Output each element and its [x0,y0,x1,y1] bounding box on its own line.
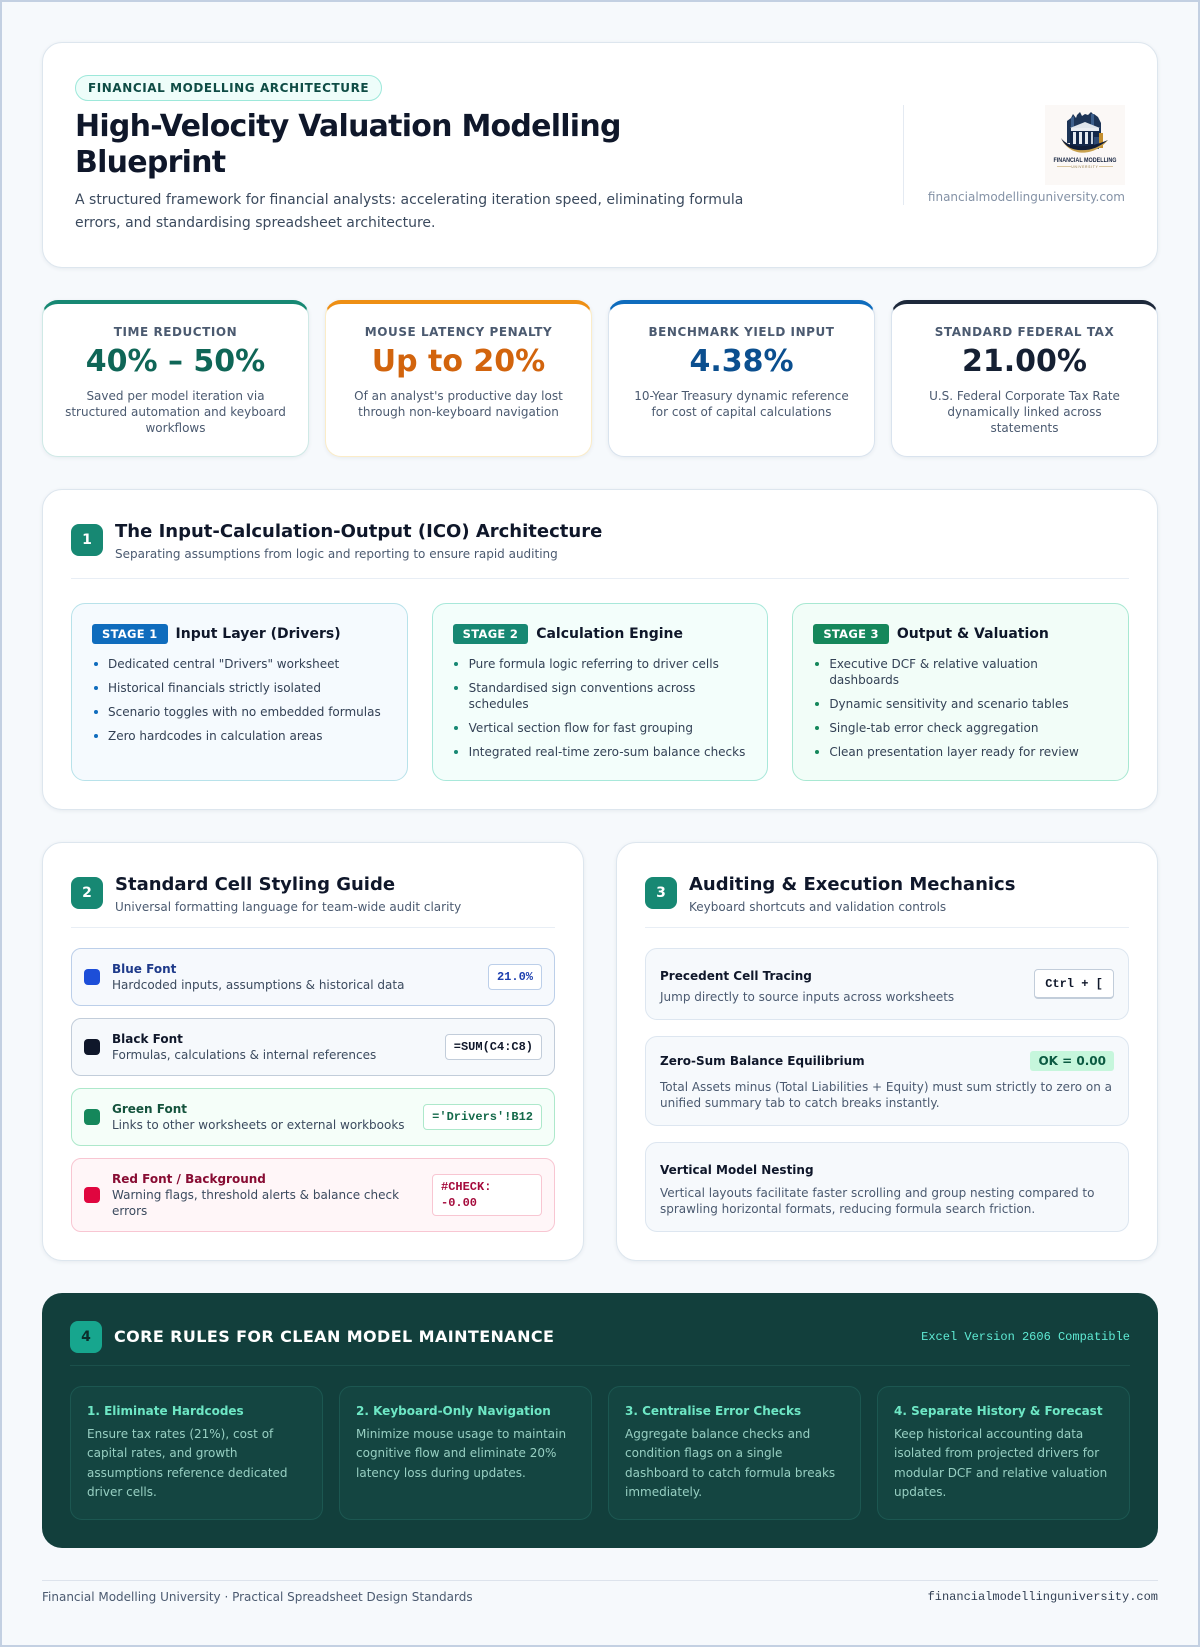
footer [42,1580,1158,1614]
rule 2 [339,1386,592,1520]
section heading 3: 3 [656,885,666,901]
rule 4: 4. Separate History & Forecast [894,1404,1103,1418]
stage 1: Dedicated central "Drivers" worksheet [108,657,339,671]
stat: time reduction: TIME REDUCTION [114,325,237,339]
subtitle: A structured framework for financial analysts: accelerating iteration speed, eliminating formula errors, and standardising spreadsheet architecture. [75,192,743,231]
row: black font [71,1018,555,1076]
section heading 2: Universal formatting language for team-wide audit clarity [115,900,461,914]
panel: cell styling guide [42,842,584,1261]
rule 4 [877,1386,1130,1520]
rule 1 [70,1386,323,1520]
rule 3: Aggregate balance checks and condition flags on a single dashboard to catch formula breaks immediately. [625,1427,835,1499]
stat: time reduction: Saved per model iteration via structured automation and keyboard workflows [65,389,286,435]
stage 3 [792,603,1129,781]
stage 3: Output & Valuation [897,626,1049,642]
rule cards [70,1386,1130,1520]
stage 1 [71,603,408,781]
rule 4: Keep historical accounting data isolated from projected drivers for modular DCF and relative valuation updates. [894,1427,1107,1499]
badge: category [75,75,382,101]
card: zero-sum balance [645,1036,1129,1126]
divider [903,105,904,205]
stage 1: Historical financials strictly isolated [108,681,321,695]
row: red font: Red Font / Background [112,1172,266,1186]
row: green font: Links to other worksheets or external workbooks [112,1118,405,1132]
stat: federal tax: U.S. Federal Corporate Tax Rate dynamically linked across statements [929,389,1120,435]
footer: Financial Modelling University · Practical Spreadsheet Design Standards [42,1590,473,1604]
stat: federal tax: 21.00% [962,344,1087,379]
stage 1: Scenario toggles with no embedded formulas [108,705,381,719]
row: blue font: Blue Font [112,962,176,976]
card: vertical nesting: Vertical layouts facilitate faster scrolling and group nesting compared to sprawling horizontal formats, reducing formula search friction. [660,1186,1094,1216]
section heading 1: Separating assumptions from logic and reporting to ensure rapid auditing [115,547,558,561]
stat: benchmark yield: 4.38% [689,344,794,379]
row: black font: Black Font [112,1032,183,1046]
row: blue font: Hardcoded inputs, assumptions & historical data [112,978,404,992]
stat: mouse latency [325,300,592,457]
card: zero-sum balance: Zero-Sum Balance Equilibrium [660,1054,865,1068]
logo: Financial Modelling University: FINANCIAL MODELLING [1054,158,1117,164]
stage cards [71,603,1129,781]
rule 2: Minimize mouse usage to maintain cognitive flow and eliminate 20% latency loss during updates. [356,1427,566,1480]
panel: core rules [42,1293,1158,1548]
rule 2: 2. Keyboard-Only Navigation [356,1404,551,1418]
stat: mouse latency: Up to 20% [372,344,545,379]
row: black font: =SUM(C4:C8) [454,1040,533,1054]
stage 2: Pure formula logic referring to driver cells [469,657,719,671]
section heading 4: Excel Version 2606 Compatible [921,1330,1130,1344]
section heading 4: CORE RULES FOR CLEAN MODEL MAINTENANCE [114,1326,554,1346]
stat: benchmark yield [608,300,875,457]
section heading 2 [71,871,555,928]
card: zero-sum balance: OK = 0.00 [1038,1054,1106,1068]
row: green font: ='Drivers'!B12 [432,1110,533,1124]
rule 3 [608,1386,861,1520]
card: vertical nesting [645,1142,1129,1232]
section heading 3: Keyboard shortcuts and validation controls [689,900,946,914]
stage 3: Single-tab error check aggregation [829,721,1038,735]
title: High-Velocity Valuation Modelling Blueprint [75,109,621,180]
stage 3: Clean presentation layer ready for review [829,745,1079,759]
section heading 2: 2 [82,885,92,901]
section heading 4: 4 [81,1329,91,1345]
row: red font: Warning flags, threshold alerts & balance check errors [112,1188,399,1218]
rule 3: 3. Centralise Error Checks [625,1404,801,1418]
stat: time reduction [42,300,309,457]
stage 2: Integrated real-time zero-sum balance checks [469,745,745,759]
row: red font: #CHECK: -0.00 [441,1180,491,1210]
panel: header [42,42,1158,268]
card: precedent tracing: Precedent Cell Tracing [660,968,812,982]
section heading 3: Auditing & Execution Mechanics [689,874,1015,895]
row: green font: Green Font [112,1102,187,1116]
card: precedent tracing: Ctrl + [ [1045,977,1103,991]
card: precedent tracing: Jump directly to source inputs across worksheets [660,990,954,1004]
row: black font: Formulas, calculations & internal references [112,1048,376,1062]
stage 1: STAGE 1 [102,627,158,641]
section heading 4 [70,1321,1130,1366]
stage 3: Dynamic sensitivity and scenario tables [829,697,1069,711]
rule 1: Ensure tax rates (21%), cost of capital rates, and growth assumptions reference dedicated driver cells. [87,1427,288,1499]
card: zero-sum balance: Total Assets minus (Total Liabilities + Equity) must sum strictly to zero on a unified summary tab to catch breaks instantly. [660,1080,1112,1110]
stat: federal tax: STANDARD FEDERAL TAX [935,325,1114,339]
section heading 1 [71,518,1129,579]
badge: category: FINANCIAL MODELLING ARCHITECTURE [88,81,369,95]
stat: benchmark yield: BENCHMARK YIELD INPUT [648,325,835,339]
url: financialmodellinguniversity.com [928,190,1125,204]
stage 3: Executive DCF & relative valuation dashboards [829,657,1038,687]
stage 2: Calculation Engine [536,626,683,642]
stage 2: Standardised sign conventions across schedules [469,681,695,711]
section heading 1: The Input-Calculation-Output (ICO) Architecture [115,521,602,542]
card: vertical nesting: Vertical Model Nesting [660,1163,814,1177]
row: green font [71,1088,555,1146]
stat: federal tax [891,300,1158,457]
row: blue font: 21.0% [497,970,533,984]
stage 3: STAGE 3 [823,627,879,641]
footer: financialmodellinguniversity.com [928,1590,1158,1604]
rule 1: 1. Eliminate Hardcodes [87,1404,244,1418]
logo: Financial Modelling University [1045,105,1125,185]
row: blue font [71,948,555,1006]
stage 2: Vertical section flow for fast grouping [469,721,693,735]
stage 2: STAGE 2 [463,627,518,641]
stat: time reduction: 40% – 50% [86,344,265,379]
panel: ICO architecture [42,489,1158,810]
stat: benchmark yield: 10-Year Treasury dynamic reference for cost of capital calculations [634,389,849,419]
section heading 1: 1 [82,532,92,548]
stage 1: Input Layer (Drivers) [176,626,341,642]
stat: mouse latency: Of an analyst's productive day lost through non-keyboard navigation [354,389,563,419]
card: precedent tracing [645,948,1129,1020]
logo: Financial Modelling University: UNIVERSITY [1071,165,1099,169]
panel: auditing and execution [616,842,1158,1261]
stage 1: Zero hardcodes in calculation areas [108,729,322,743]
row: red font [71,1158,555,1232]
section heading 2: Standard Cell Styling Guide [115,874,395,895]
section heading 3 [645,871,1129,928]
stage 2 [432,603,768,781]
stat: mouse latency: MOUSE LATENCY PENALTY [365,325,552,339]
